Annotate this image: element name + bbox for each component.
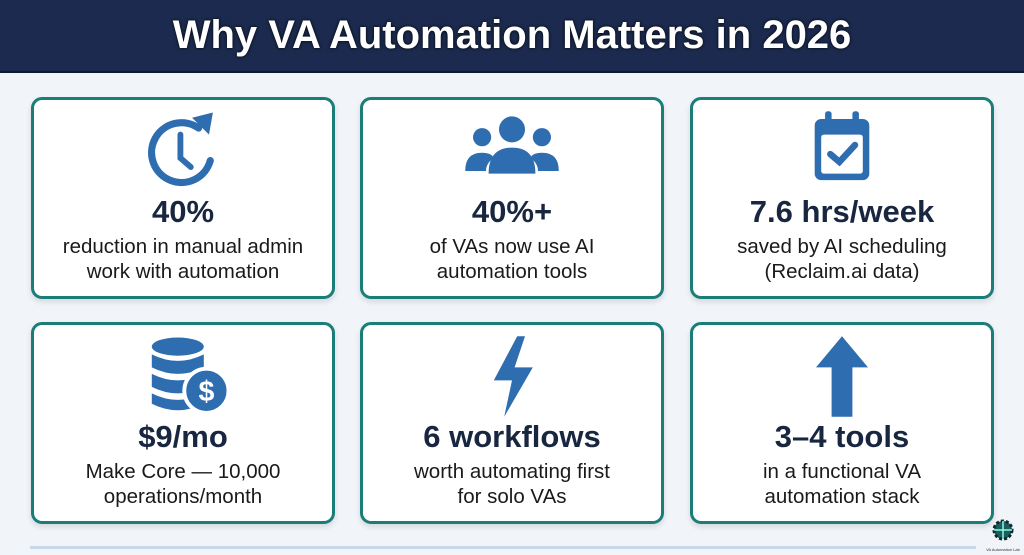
stat: 6 workflows bbox=[423, 419, 601, 454]
title: Why VA Automation Matters in 2026 bbox=[173, 13, 851, 57]
icon: calendar bbox=[814, 111, 870, 180]
panel: Make price bbox=[31, 322, 335, 524]
panel: scheduling bbox=[690, 97, 994, 299]
icon: up arrow bbox=[816, 336, 868, 417]
text: Make Core — 10,000 bbox=[86, 460, 280, 483]
panel: workflows bbox=[360, 322, 664, 524]
text: for solo VAs bbox=[458, 485, 566, 508]
panel: tools stack bbox=[690, 322, 994, 524]
title bbox=[0, 0, 1024, 73]
logo: VA Automation Lab bbox=[986, 547, 1020, 552]
panel: VAs using AI bbox=[360, 97, 664, 299]
stat: 7.6 hrs/week bbox=[750, 194, 934, 229]
text: in a functional VA bbox=[763, 460, 921, 483]
stat: $9/mo bbox=[138, 419, 228, 454]
text: automation stack bbox=[764, 485, 919, 508]
text: of VAs now use AI bbox=[430, 235, 594, 258]
text bbox=[63, 235, 303, 283]
stat: 3–4 tools bbox=[775, 419, 909, 454]
text: reduction in manual admin bbox=[63, 235, 303, 258]
icon: coins bbox=[152, 338, 227, 411]
logo bbox=[986, 520, 1020, 552]
text: saved by AI scheduling bbox=[737, 235, 947, 258]
text: (Reclaim.ai data) bbox=[765, 260, 919, 283]
panel: admin reduction bbox=[31, 97, 335, 299]
icon: people bbox=[465, 116, 559, 174]
icon: lightning bbox=[494, 336, 533, 417]
text bbox=[430, 235, 594, 283]
text bbox=[737, 235, 947, 283]
footer bar bbox=[30, 546, 976, 549]
icon: coins: $ bbox=[198, 376, 214, 408]
text bbox=[414, 460, 610, 508]
text: operations/month bbox=[104, 485, 262, 508]
text: work with automation bbox=[87, 260, 279, 283]
icon: clock bbox=[148, 112, 214, 186]
stat: 40% bbox=[152, 194, 214, 229]
text bbox=[763, 460, 921, 508]
text: automation tools bbox=[437, 260, 587, 283]
text bbox=[86, 460, 280, 508]
stat: 40%+ bbox=[472, 194, 552, 229]
text: worth automating first bbox=[414, 460, 610, 483]
